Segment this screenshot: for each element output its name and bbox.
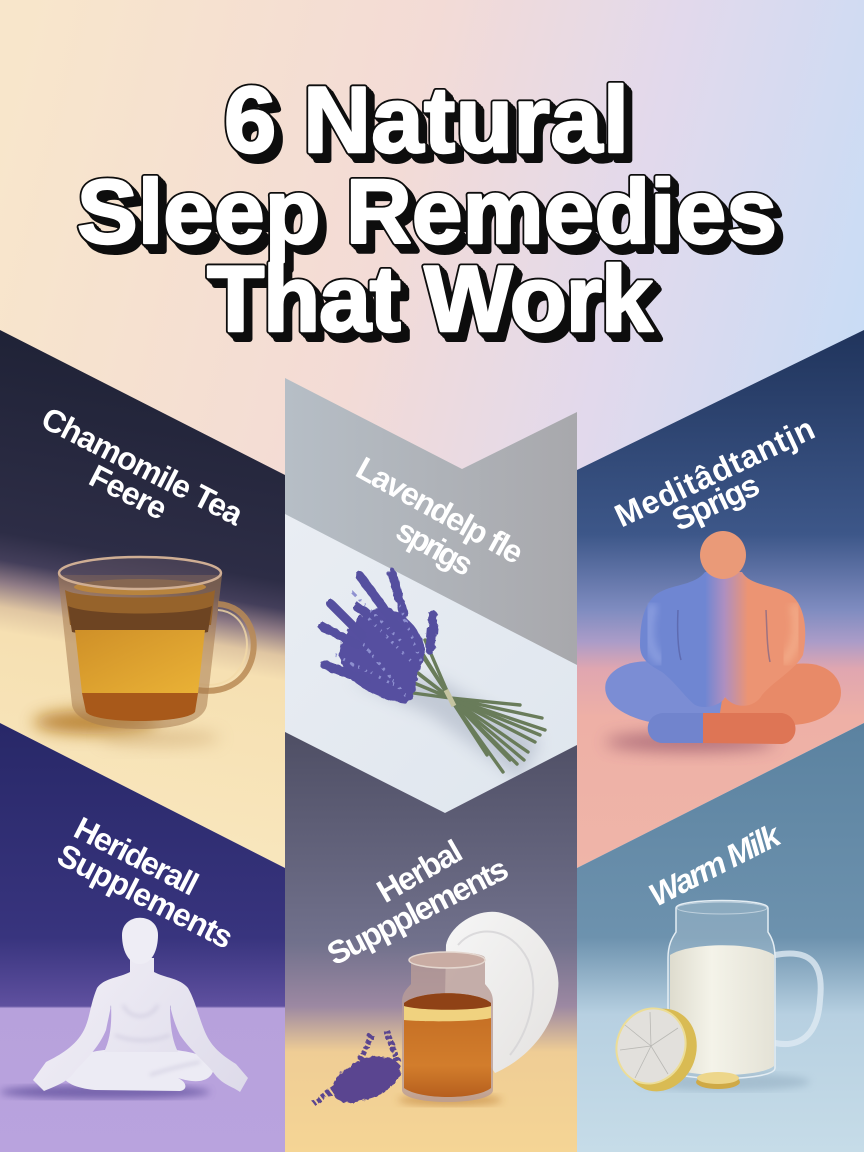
title: 6 Natural — [224, 67, 629, 172]
icon: glass jar of milk — [640, 900, 821, 1091]
panel: chamomile tea — [0, 330, 285, 868]
panel: warm milk — [577, 723, 864, 1152]
label: lavender sprigs: Lavendelp fle — [350, 450, 530, 571]
icon: white meditating figure — [0, 918, 248, 1099]
icon: lavender bunch — [323, 573, 545, 780]
title: That Work — [207, 246, 654, 351]
title: Sleep Remedies — [77, 162, 777, 263]
label: chamomile tea: Chamomile Tea — [36, 400, 249, 532]
label: meditation sprigs: Sprigs — [666, 466, 765, 538]
panel: herbal supplements, seated figure — [0, 723, 285, 1152]
title: Sleep Remedies — [77, 162, 777, 263]
icon: dried lavender — [314, 1030, 400, 1104]
label: warm milk: Warm Milk — [643, 816, 788, 913]
panel: lavender sprigs — [285, 378, 577, 813]
panel: herbal supplements jar — [285, 732, 577, 1152]
icon: honey jar — [398, 952, 502, 1106]
icon: lemon slice — [606, 998, 708, 1102]
label: herbal supplements centre: Herbal — [371, 833, 468, 910]
label: lavender sprigs: sprigs — [390, 512, 480, 583]
label: chamomile tea: Feere — [84, 457, 173, 527]
title: That Work — [207, 246, 654, 351]
icon: small tablet — [696, 1072, 740, 1089]
label: herbal supplements left: Supplements — [52, 836, 239, 956]
icon: glass mug of tea — [33, 557, 254, 746]
icon: seated meditating figure — [605, 531, 841, 751]
label: meditation sprigs: Meditâdtantjn — [609, 410, 820, 534]
panel: meditation — [577, 330, 864, 868]
icon: white pillow — [445, 912, 558, 1073]
title — [77, 67, 777, 351]
title: 6 Natural — [224, 67, 629, 172]
label: herbal supplements left: Heriderall — [69, 810, 204, 903]
label: herbal supplements centre: Suppplements — [321, 850, 514, 972]
